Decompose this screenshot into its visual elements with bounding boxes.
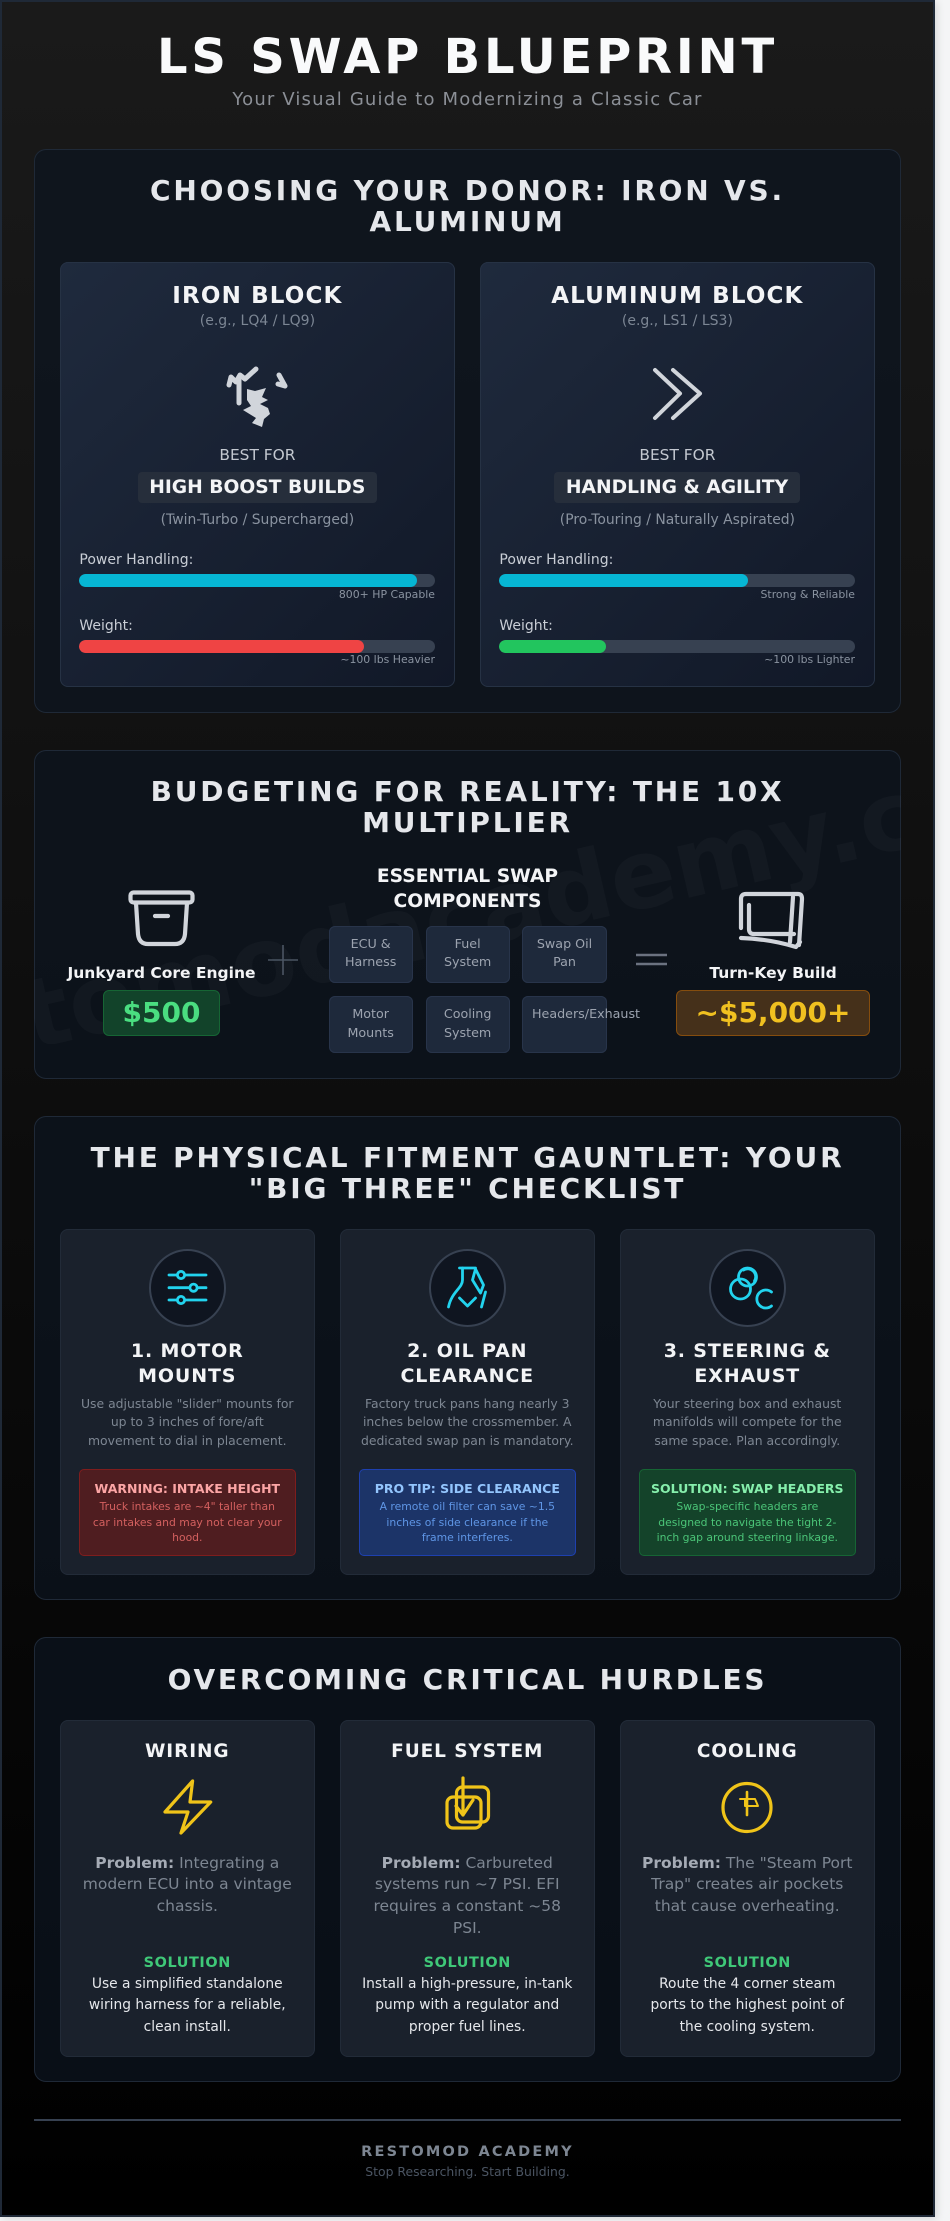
wiring title: WIRING — [145, 1741, 230, 1762]
heading: fitment gauntlet: THE PHYSICAL FITMENT GAUNTLET: YOUR — [91, 1141, 844, 1174]
header — [157, 29, 778, 110]
pro tip text: inches of side clearance if the — [386, 1516, 548, 1528]
power handling label: Power Handling: — [499, 552, 613, 568]
icon: double chevron — [652, 368, 702, 420]
weight note: ~100 lbs Heavier — [340, 653, 435, 666]
wiring solution label: SOLUTION — [144, 1955, 231, 1971]
components heading — [377, 866, 558, 912]
fuel solution — [362, 1976, 572, 2035]
iron block title: IRON BLOCK — [172, 283, 342, 309]
aluminum block examples: (e.g., LS1 / LS3) — [622, 313, 733, 329]
best for note: (Twin-Turbo / Supercharged) — [161, 512, 354, 528]
fuel system title: FUEL SYSTEM — [391, 1741, 543, 1762]
junkyard label: Junkyard Core Engine — [68, 964, 256, 982]
best for value — [138, 472, 377, 503]
heading: critical hurdles: OVERCOMING CRITICAL HURDLES — [168, 1663, 767, 1696]
motor mounts title: MOUNTS — [138, 1365, 236, 1387]
title: LS SWAP BLUEPRINT — [157, 29, 778, 85]
heading: fitment gauntlet — [90, 1141, 844, 1205]
wiring problem: chassis. — [157, 1897, 218, 1915]
cooling solution — [650, 1976, 844, 2035]
heading: choosing your donor: ALUMINUM — [370, 205, 565, 238]
pro tip text — [380, 1500, 555, 1544]
component: swap oil pan — [522, 926, 607, 983]
component: motor mounts: Mounts — [347, 1025, 394, 1040]
footer — [34, 2119, 901, 2185]
wiring solution — [89, 1976, 286, 2035]
card: motor mounts — [60, 1229, 314, 1575]
best for label: BEST FOR — [219, 446, 295, 464]
cooling problem: that cause overheating. — [655, 1897, 840, 1915]
cooling solution: ports to the highest point of — [650, 1997, 844, 2013]
components heading: COMPONENTS — [393, 890, 542, 912]
component: motor mounts — [328, 996, 413, 1053]
wiring problem: modern ECU into a vintage — [83, 1875, 292, 1893]
component: fuel system: Fuel — [455, 936, 481, 951]
steering text: manifolds will compete for the — [653, 1414, 842, 1429]
power handling bar — [499, 574, 855, 587]
cooling problem: Problem: The "Steam Port — [642, 1854, 852, 1872]
steering title — [664, 1340, 831, 1387]
weight label: Weight: — [79, 618, 133, 634]
heading: budgeting: BUDGETING FOR REALITY: THE 10X — [151, 775, 784, 808]
components heading: ESSENTIAL SWAP — [377, 866, 558, 886]
weight note: ~100 lbs Lighter — [764, 653, 855, 666]
component: motor mounts: Motor — [352, 1006, 389, 1021]
heading: budgeting — [151, 775, 784, 839]
component: headers and exhaust: Headers/Exhaust — [532, 1006, 640, 1021]
motor mounts text: up to 3 inches of fore/aft — [111, 1414, 264, 1429]
icon: lightning bolt — [163, 1779, 212, 1835]
best for note: (Pro-Touring / Naturally Aspirated) — [560, 512, 795, 528]
fuel problem — [373, 1854, 561, 1937]
steering text: same space. Plan accordingly. — [654, 1433, 840, 1448]
oil pan text: dedicated swap pan is mandatory. — [361, 1433, 574, 1448]
icon: fuel pump — [445, 1776, 490, 1830]
card: iron block — [60, 262, 455, 687]
icon: iron engine block — [226, 366, 288, 427]
weight bar — [79, 640, 435, 653]
equals sign — [636, 954, 667, 966]
fuel solution label: SOLUTION — [424, 1955, 511, 1971]
weight bar — [499, 640, 855, 653]
motor mounts text — [81, 1396, 294, 1448]
turn-key price — [676, 990, 870, 1036]
icon: sliders — [149, 1249, 226, 1327]
panel: choosing your donor — [34, 149, 901, 713]
card: cooling — [620, 1720, 874, 2057]
best for value: HANDLING & AGILITY — [566, 477, 788, 498]
warning text: hood. — [172, 1531, 202, 1544]
warning title: WARNING: INTAKE HEIGHT — [95, 1481, 280, 1496]
turn-key label: Turn-Key Build — [709, 964, 837, 982]
brand name: RESTOMOD ACADEMY — [361, 2144, 574, 2160]
best for value: HIGH BOOST BUILDS — [149, 477, 365, 498]
card: oil pan clearance — [340, 1229, 594, 1575]
steering title: 3. STEERING & — [664, 1340, 831, 1362]
heading: choosing your donor — [150, 174, 785, 238]
solution text: inch gap around steering linkage. — [657, 1531, 838, 1544]
wiring problem: Problem: Integrating a — [95, 1854, 279, 1872]
aluminum block title: ALUMINUM BLOCK — [551, 283, 804, 309]
fuel solution: proper fuel lines. — [409, 2019, 526, 2035]
component: fuel system — [426, 926, 510, 983]
tagline: Stop Researching. Start Building. — [365, 2164, 570, 2179]
wiring solution: wiring harness for a reliable, — [89, 1997, 286, 2013]
best for label: BEST FOR — [639, 446, 715, 464]
pro tip text: A remote oil filter can save ~1.5 — [380, 1500, 555, 1513]
steering text: Your steering box and exhaust — [653, 1396, 841, 1411]
oil pan title — [400, 1340, 534, 1387]
callout: solution — [639, 1469, 856, 1556]
power handling label: Power Handling: — [79, 552, 193, 568]
heading: choosing your donor: CHOOSING YOUR DONOR: IRON VS. — [150, 174, 785, 207]
callout: pro tip — [359, 1469, 576, 1556]
fuel problem: systems run ~7 PSI. EFI — [375, 1875, 560, 1893]
cooling solution label: SOLUTION — [704, 1955, 791, 1971]
component: ECU and harness: ECU & — [351, 936, 391, 951]
power handling note: 800+ HP Capable — [339, 588, 435, 601]
warning text: Truck intakes are ~4" taller than — [100, 1500, 275, 1513]
cooling problem: Trap" creates air pockets — [651, 1875, 843, 1893]
component: fuel system: System — [444, 954, 491, 969]
icon: turn-key engine — [738, 892, 804, 950]
plus sign — [268, 945, 298, 975]
panel: physical fitment gauntlet — [34, 1116, 901, 1600]
icon: temperature gauge — [721, 1782, 773, 1834]
fuel solution: pump with a regulator and — [375, 1997, 559, 2013]
oil pan text: inches below the crossmember. A — [363, 1414, 572, 1429]
turn-key price: ~$5,000+ — [696, 996, 850, 1029]
best for value — [554, 472, 800, 503]
oil pan title: CLEARANCE — [400, 1365, 534, 1387]
component: swap oil pan: Pan — [553, 954, 576, 969]
card: fuel system — [340, 1720, 594, 2057]
icon: junkyard engine crate — [128, 890, 195, 946]
component: ECU and harness: Harness — [345, 954, 396, 969]
component: swap oil pan: Swap Oil — [537, 936, 592, 951]
steering text — [653, 1396, 842, 1448]
cooling title: COOLING — [697, 1741, 798, 1762]
solution text — [657, 1500, 838, 1544]
wiring solution: Use a simplified standalone — [92, 1976, 283, 1992]
component: headers and exhaust — [522, 996, 607, 1053]
motor mounts title — [131, 1340, 244, 1387]
component: cooling system — [426, 996, 510, 1053]
motor mounts title: 1. MOTOR — [131, 1340, 244, 1362]
cooling solution: Route the 4 corner steam — [659, 1976, 835, 1992]
iron block examples: (e.g., LQ4 / LQ9) — [200, 313, 315, 329]
cooling problem — [642, 1854, 852, 1915]
fuel problem: requires a constant ~58 — [373, 1897, 561, 1915]
wiring problem — [83, 1854, 292, 1915]
oil pan text: Factory truck pans hang nearly 3 — [365, 1396, 570, 1411]
power handling bar — [79, 574, 435, 587]
icon: linked circles — [708, 1249, 786, 1327]
fuel solution: Install a high-pressure, in-tank — [362, 1976, 572, 1992]
icon: oil flask — [428, 1249, 506, 1327]
steering title: EXHAUST — [694, 1365, 800, 1387]
fuel problem: PSI. — [453, 1919, 482, 1937]
junkyard price: $500 — [123, 996, 200, 1029]
panel: critical hurdles — [34, 1637, 901, 2082]
solution title: SOLUTION: SWAP HEADERS — [651, 1481, 844, 1496]
component: ECU and harness — [328, 926, 413, 983]
solution text: designed to navigate the tight 2- — [658, 1516, 836, 1528]
component: cooling system: System — [444, 1025, 491, 1040]
component: cooling system: Cooling — [444, 1006, 491, 1021]
subtitle: Your Visual Guide to Modernizing a Classic Car — [232, 89, 703, 110]
pro tip text: frame interferes. — [422, 1531, 513, 1544]
weight label: Weight: — [499, 618, 553, 634]
cooling solution: the cooling system. — [680, 2019, 815, 2035]
oil pan title: 2. OIL PAN — [407, 1340, 527, 1362]
callout: warning — [79, 1469, 296, 1556]
panel: budgeting — [34, 750, 901, 1079]
card: steering and exhaust — [620, 1229, 874, 1575]
motor mounts text: movement to dial in placement. — [88, 1433, 287, 1448]
solution text: Swap-specific headers are — [676, 1500, 818, 1513]
junkyard price — [103, 990, 220, 1036]
heading: budgeting: MULTIPLIER — [362, 806, 573, 839]
motor mounts text: Use adjustable "slider" mounts for — [81, 1396, 294, 1411]
warning text — [93, 1500, 282, 1544]
card: aluminum block — [480, 262, 875, 687]
oil pan text — [361, 1396, 574, 1448]
card: wiring — [60, 1720, 314, 2057]
power handling note: Strong & Reliable — [761, 588, 855, 601]
heading: fitment gauntlet: "BIG THREE" CHECKLIST — [249, 1172, 686, 1205]
warning text: car intakes and may not clear your — [93, 1516, 282, 1528]
pro tip title: PRO TIP: SIDE CLEARANCE — [375, 1481, 560, 1496]
wiring solution: clean install. — [144, 2019, 231, 2035]
fuel problem: Problem: Carbureted — [382, 1854, 553, 1872]
